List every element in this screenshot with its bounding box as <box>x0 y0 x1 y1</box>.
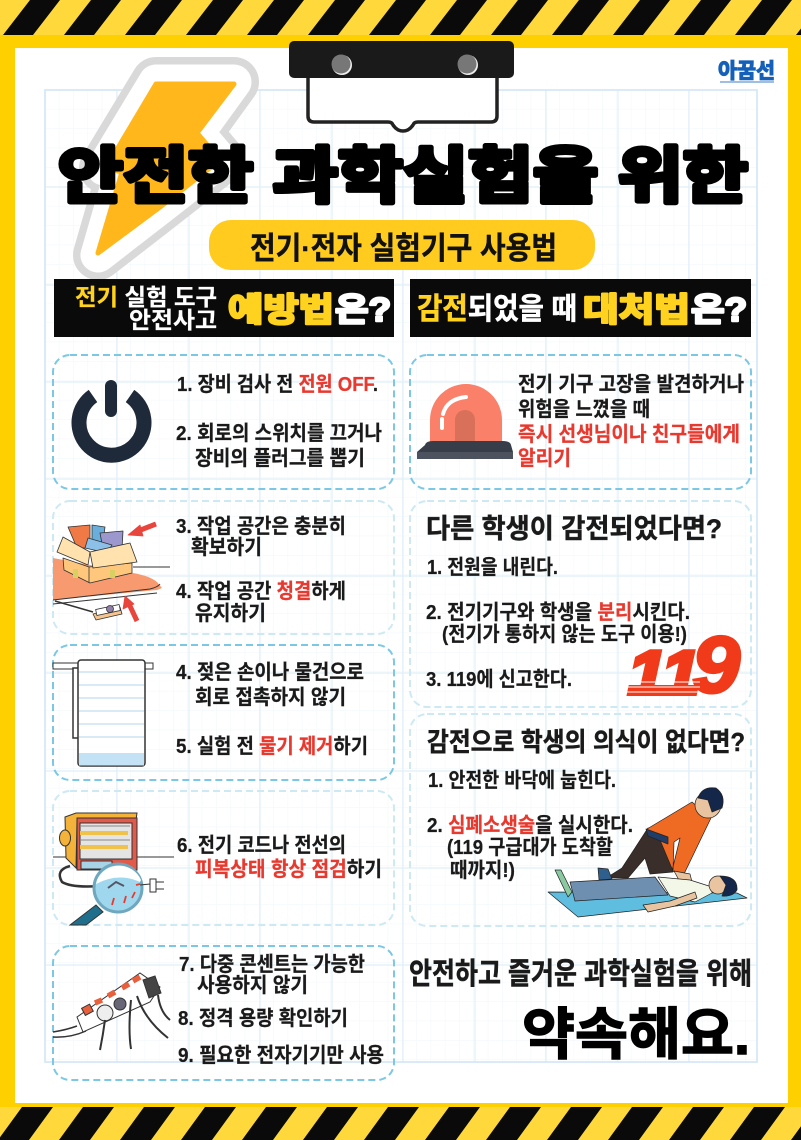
text: steps <box>427 769 633 882</box>
header: response: 은? <box>691 291 747 328</box>
text: steps: 1. 전원을 내린다. <box>427 556 558 579</box>
text: steps 7 to 9 <box>178 953 384 1067</box>
text: step 6 <box>177 834 382 881</box>
text: steps: 3. 119에 신고한다. <box>426 668 572 691</box>
text: steps: (119 구급대가 도착할 <box>447 836 613 859</box>
text: steps 4 and 5: 5. 실험 전 물기 제거하기 <box>176 735 368 758</box>
illustration: CPR <box>548 788 747 917</box>
text: steps 3 and 4: 4. 작업 공간 청결하게 <box>176 580 346 603</box>
text: steps <box>426 556 690 691</box>
text: steps 4 and 5 <box>176 661 368 758</box>
text: steps 1 and 2: 1. 장비 검사 전 전원 OFF. <box>177 373 378 396</box>
text: steps 4 and 5: 회로 접촉하지 않기 <box>195 686 346 709</box>
heading: 감전으로 학생의 의식이 없다면? <box>427 727 745 757</box>
icon: heater and magnifier <box>53 813 174 925</box>
header: prevention: 전기 실험 도구 <box>75 284 217 310</box>
text: steps: (전기가 통하지 않는 도구 이용!) <box>442 623 687 646</box>
text: steps 3 and 4: 확보하기 <box>191 536 262 559</box>
text: steps 7 to 9: 사용하지 않기 <box>197 974 308 997</box>
subtitle pill <box>209 220 595 270</box>
panel: cable check <box>53 791 394 925</box>
text: step 6: 피복상태 항상 점검하기 <box>195 858 382 881</box>
text: notify: 알리기 <box>518 447 571 470</box>
header: prevention: 은? <box>335 291 391 328</box>
bottom hazard stripes <box>0 1107 801 1140</box>
header: response <box>410 279 751 337</box>
icon: box on mat <box>53 524 170 621</box>
text: steps 1 and 2: 장비의 플러그를 뽑기 <box>195 447 365 470</box>
subtitle pill: 전기·전자 실험기구 사용법 <box>250 231 557 266</box>
top hazard stripes <box>0 0 801 35</box>
119 emblem: 11 <box>628 639 700 708</box>
icon: towel on rod <box>53 660 153 766</box>
text: notify: 전기 기구 고장을 발견하거나 <box>518 373 744 396</box>
text: steps 3 and 4: 유지하기 <box>195 602 266 625</box>
text: steps 7 to 9: 8. 정격 용량 확인하기 <box>178 1007 348 1030</box>
119 emblem: 9 <box>692 620 741 709</box>
119 emblem <box>625 620 741 709</box>
text: steps 1 and 2 <box>176 373 382 470</box>
icon: power button <box>79 386 144 455</box>
text: steps 3 and 4: 3. 작업 공간은 충분히 <box>176 515 346 538</box>
header: response: 감전되었을 때 <box>417 293 577 326</box>
text: steps: 때까지!) <box>450 859 515 882</box>
icon: siren <box>417 384 513 459</box>
text: steps 7 to 9: 7. 다중 콘센트는 가능한 <box>179 953 365 976</box>
text: steps: 2. 전기기구와 학생을 분리시킨다. <box>426 601 690 624</box>
text: steps: 1. 안전한 바닥에 눕힌다. <box>428 769 616 792</box>
text: steps: 2. 심폐소생술을 실시한다. <box>427 814 633 837</box>
title: 안전한 과학실험을 위한 <box>58 142 748 210</box>
text: steps 3 and 4 <box>176 515 346 625</box>
panel: notify <box>410 355 751 489</box>
text: steps 7 to 9: 9. 필요한 전자기기만 사용 <box>178 1044 384 1067</box>
text: step 6: 6. 전기 코드나 전선의 <box>177 834 346 857</box>
panel: clean workspace <box>53 501 394 634</box>
panel: wet hands <box>53 645 394 780</box>
closing pledge: 약속해요. <box>522 1003 750 1066</box>
grid paper background <box>45 90 757 1062</box>
logo: 아꿈선 <box>718 60 775 83</box>
icon: lightning bolt <box>98 82 234 255</box>
header: prevention: 예방법 <box>228 291 334 328</box>
panel: power off <box>53 355 394 489</box>
clipboard clip <box>289 41 514 131</box>
panel: multi-tap <box>53 946 394 1080</box>
heading: 다른 학생이 감전되었다면? <box>426 514 722 544</box>
header: prevention <box>54 279 394 337</box>
icon: power strip <box>53 973 170 1050</box>
text: notify: 위험을 느꼈을 때 <box>518 398 650 421</box>
header: response: 대처법 <box>583 291 690 328</box>
text: notify <box>518 373 744 470</box>
text: notify: 즉시 선생님이나 친구들에게 <box>518 423 740 446</box>
text: steps 1 and 2: 2. 회로의 스위치를 끄거나 <box>176 422 382 445</box>
panel: unconscious student <box>410 714 751 926</box>
panel: other student shocked <box>410 501 751 709</box>
text: steps 4 and 5: 4. 젖은 손이나 물건으로 <box>176 661 364 684</box>
header: prevention: 안전사고 <box>129 307 217 333</box>
